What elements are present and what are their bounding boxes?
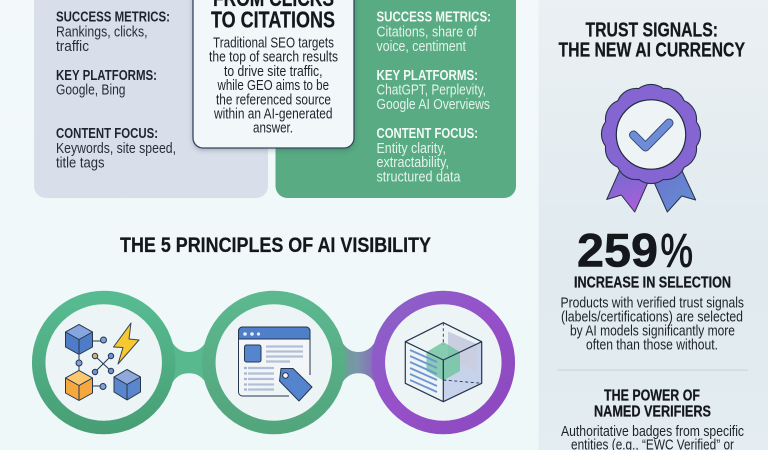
named verifiers heading: NAMED VERIFIERS — [594, 404, 711, 421]
card body text: within an AI-generated — [213, 106, 332, 122]
SEO content focus: Keywords, site speed, — [56, 141, 176, 157]
connector: first to second — [166, 330, 212, 395]
GEO success metrics: Citations, share of — [376, 24, 478, 40]
stat description: by AI models significantly more — [570, 324, 735, 340]
SEO success metrics: Rankings, clicks, — [56, 24, 148, 40]
named verifiers description — [561, 424, 744, 450]
SEO content focus: CONTENT FOCUS: — [56, 126, 158, 142]
icon: connected entity cubes — [66, 323, 140, 400]
trust signals heading: TRUST SIGNALS: — [586, 20, 718, 42]
GEO content focus: CONTENT FOCUS: — [376, 126, 478, 142]
card body text — [209, 36, 338, 136]
card body text: Traditional SEO targets — [213, 36, 334, 52]
stat: 259 percent: 259 — [577, 224, 658, 276]
named verifiers heading: THE POWER OF — [604, 388, 700, 405]
card body text: to drive site traffic, — [224, 64, 322, 80]
card body text: the referenced source — [216, 92, 331, 108]
SEO success metrics: SUCCESS METRICS: — [56, 10, 170, 26]
stat description — [560, 296, 744, 353]
SEO key platforms: KEY PLATFORMS: — [56, 68, 157, 84]
panel: generative engine optimization — [276, 0, 516, 198]
icon: verified badge — [601, 84, 701, 212]
SEO key platforms: Google, Bing — [56, 82, 126, 98]
GEO content focus — [376, 126, 478, 186]
GEO success metrics — [376, 10, 491, 55]
card heading — [211, 0, 335, 32]
card heading: TO CITATIONS — [211, 6, 335, 32]
SEO success metrics — [56, 10, 170, 55]
stat: 259 percent — [577, 224, 693, 276]
GEO key platforms: ChatGPT, Perplevity, — [376, 82, 486, 98]
chain of principle circles — [39, 298, 508, 428]
stat label: INCREASE IN SELECTION — [574, 275, 731, 292]
stat description: often than those without. — [586, 337, 718, 353]
icon: web page with tag — [238, 327, 312, 401]
heading: five principles: THE 5 PRINCIPLES OF AI VISIBILITY — [120, 234, 431, 257]
ring: principle one — [39, 298, 169, 428]
GEO success metrics: voice, centiment — [376, 39, 466, 55]
panel: trust signals — [538, 0, 768, 450]
SEO success metrics: traffic — [56, 39, 89, 55]
named verifiers heading — [594, 388, 711, 421]
ring: principle two — [209, 298, 339, 428]
SEO content focus: title tags — [56, 156, 104, 172]
GEO content focus: Entity clarity, — [376, 141, 446, 157]
GEO key platforms: Google AI Overviews — [376, 97, 490, 113]
GEO content focus: extractability, — [376, 155, 449, 171]
SEO content focus — [56, 126, 176, 172]
card body text: the top of search results — [209, 50, 338, 66]
connector: second to third — [336, 330, 381, 395]
ring: principle three — [378, 298, 508, 428]
card body text: while GEO aims to be — [217, 78, 329, 94]
icon: transparent cube with document — [405, 323, 482, 402]
stat: 259 percent: % — [660, 224, 693, 276]
GEO success metrics: SUCCESS METRICS: — [376, 10, 491, 26]
trust signals heading — [558, 20, 746, 62]
GEO key platforms — [376, 68, 490, 113]
center card: from clicks to citations — [193, 0, 354, 148]
GEO content focus: structured data — [376, 170, 461, 186]
SEO key platforms — [56, 68, 157, 98]
panel: traditional SEO — [34, 0, 268, 198]
card body text: answer. — [253, 120, 293, 136]
GEO key platforms: KEY PLATFORMS: — [376, 68, 478, 84]
